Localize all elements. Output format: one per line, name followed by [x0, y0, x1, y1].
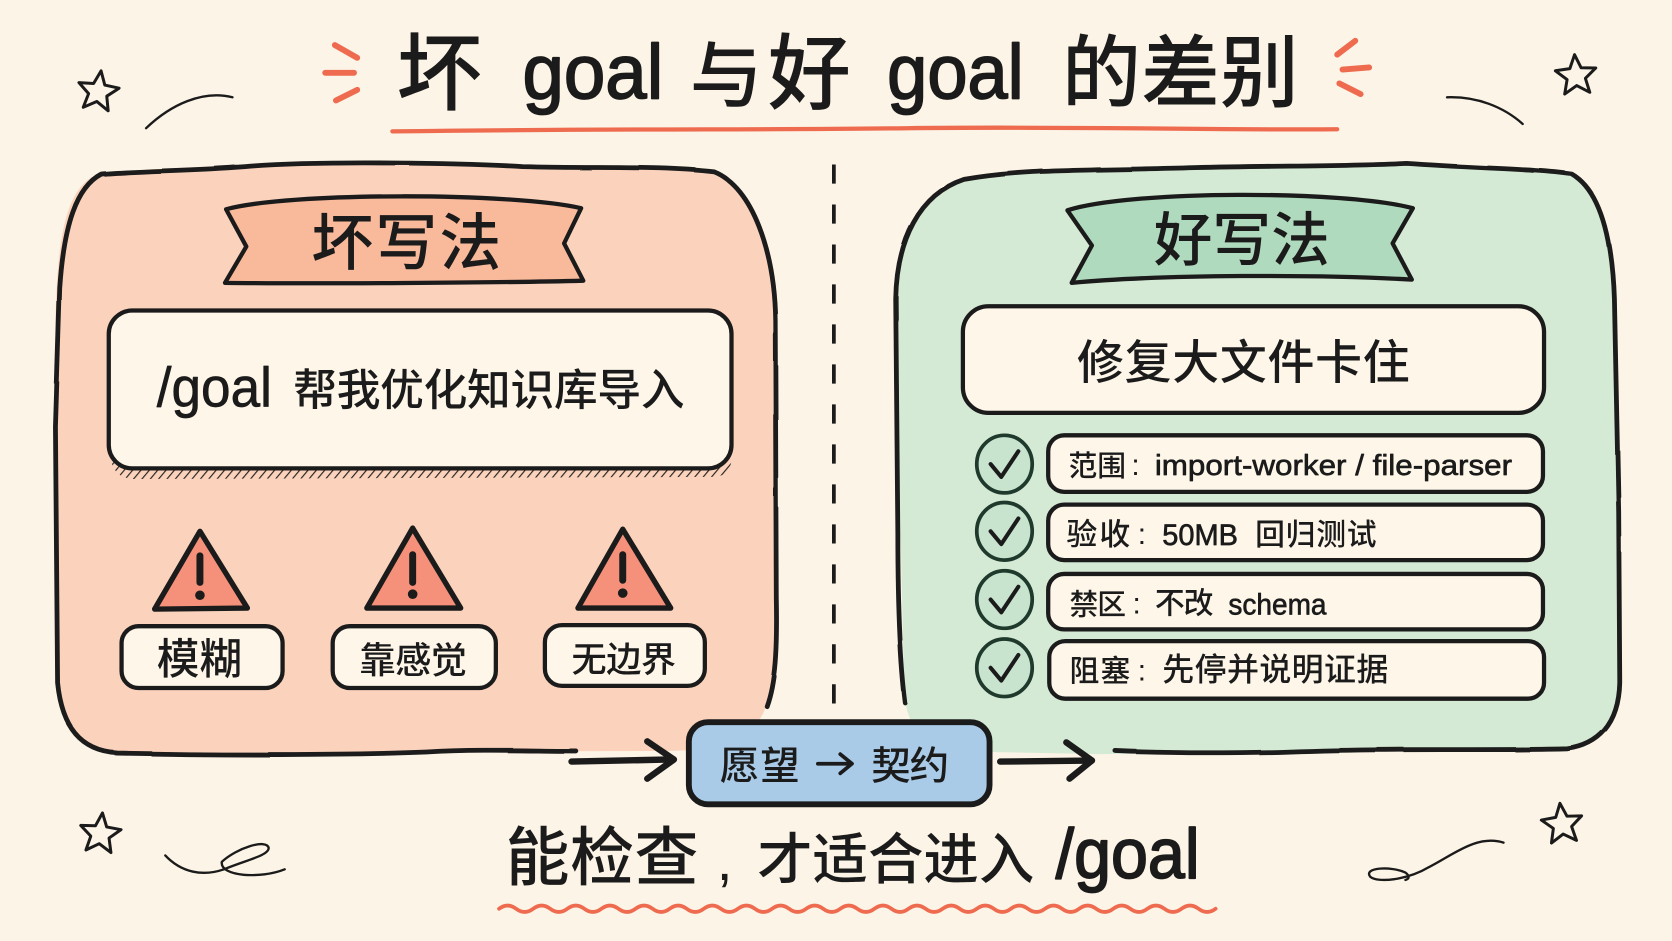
warning 2: by feel: [333, 528, 496, 688]
wish to contract badge: 愿望: [720, 745, 800, 789]
panel outline: [55, 163, 777, 755]
check 1: [977, 435, 1032, 493]
wish to contract badge: [689, 722, 990, 804]
arrow into contract: [572, 741, 674, 779]
forbidden row: [1048, 574, 1543, 629]
scope row: :: [1131, 449, 1140, 482]
panel: good writing: [896, 163, 1621, 754]
vague goal card: /goal: [157, 357, 272, 419]
panel fill: [55, 163, 777, 753]
title: 好: [768, 28, 851, 121]
warning 1: vague: [122, 531, 283, 688]
forbidden row: schema: [1228, 588, 1327, 621]
title: goal: [887, 30, 1024, 115]
arrow out of contract: [1000, 742, 1092, 779]
left burst marks: [325, 45, 357, 100]
title: 的差别: [1062, 29, 1299, 117]
bottom takeaway: [505, 814, 1200, 894]
acceptance row: 回归测试: [1255, 519, 1377, 552]
star top left: [76, 68, 121, 112]
bottom takeaway: ,: [717, 829, 733, 893]
acceptance row: 验收: [1066, 517, 1130, 552]
squiggle top left: [146, 95, 232, 128]
vague goal card: 帮我优化知识库导入: [293, 366, 685, 415]
banner: 好写法: [1154, 208, 1330, 273]
warning 3: no boundary: [545, 529, 705, 686]
scope row: import-worker / file-parser: [1155, 450, 1512, 482]
check 2: [977, 502, 1032, 560]
panel outline: [896, 163, 1620, 753]
bottom takeaway: 才适合进入: [757, 829, 1034, 891]
check 4: [977, 639, 1032, 697]
squiggle bottom right: [1369, 841, 1504, 880]
banner: [225, 196, 583, 283]
title: 与: [690, 37, 762, 118]
forbidden row: :: [1132, 587, 1141, 620]
panel fill: [896, 163, 1621, 754]
concrete goal card: [963, 306, 1544, 413]
scope row: 范围: [1068, 451, 1126, 483]
banner: 坏写法: [311, 210, 501, 279]
squiggle top right: [1447, 97, 1523, 124]
blocked row: 阻塞: [1070, 656, 1130, 689]
wish to contract badge: 契约: [871, 745, 949, 789]
title underline: [392, 128, 1337, 131]
blocked row: :: [1138, 655, 1146, 688]
squiggle bottom left: [165, 844, 285, 875]
bottom takeaway: /goal: [1056, 814, 1200, 893]
title: 坏: [397, 28, 482, 123]
blocked row: 先停并说明证据: [1162, 652, 1388, 688]
hatch shadow: [111, 461, 732, 479]
acceptance row: [1048, 505, 1543, 560]
star bottom right: [1540, 801, 1584, 844]
right burst marks: [1337, 41, 1369, 94]
vague goal card: [109, 311, 731, 468]
forbidden row: 不改: [1155, 587, 1214, 620]
center dashed divider: [832, 164, 836, 706]
title: goal: [523, 30, 663, 115]
check 3: [977, 571, 1032, 628]
blocked row: [1049, 641, 1544, 699]
wavy underline: [499, 906, 1216, 912]
acceptance row: 50MB: [1162, 519, 1238, 552]
warning 1: vague: 模糊: [157, 636, 242, 684]
banner: [1067, 195, 1413, 283]
forbidden row: 禁区: [1070, 589, 1126, 621]
panel: bad writing: [55, 163, 777, 755]
title: [397, 28, 1299, 123]
scope row: [1048, 435, 1543, 492]
concrete goal card: 修复大文件卡住: [1077, 337, 1410, 389]
acceptance row: :: [1138, 518, 1146, 551]
star top right: [1554, 53, 1597, 95]
star bottom left: [78, 811, 123, 853]
warning 2: by feel: 靠感觉: [359, 640, 467, 681]
warning 3: no boundary: 无边界: [572, 641, 676, 680]
bottom takeaway: 能检查: [505, 822, 698, 894]
